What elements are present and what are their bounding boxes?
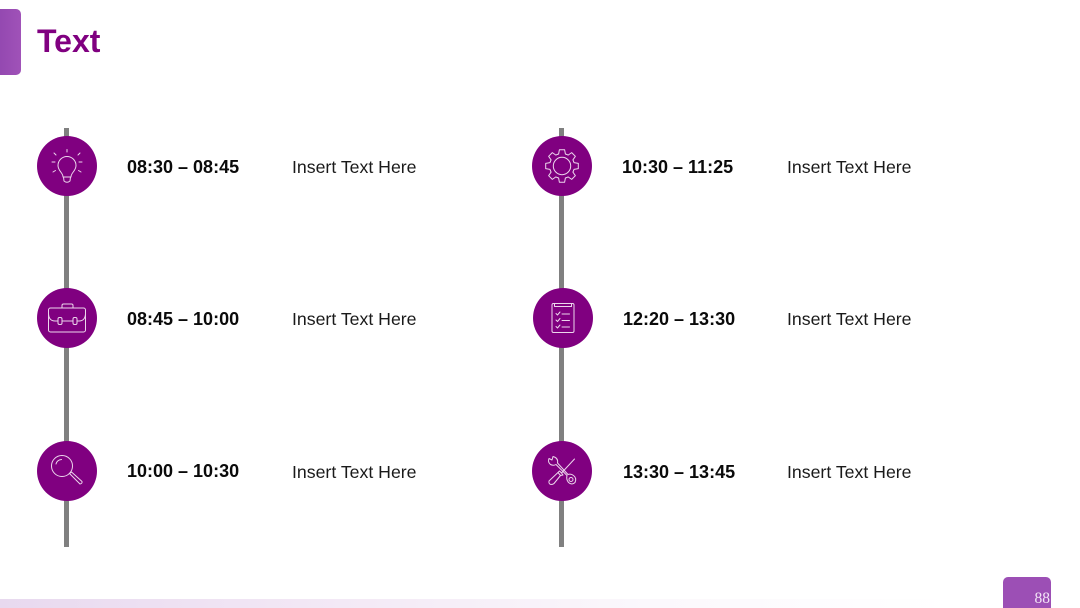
left timeline line	[64, 128, 69, 547]
label: row 1 right: Insert Text Here	[787, 157, 912, 177]
icon: magnifying glass	[37, 441, 97, 501]
icon: checklist clipboard	[533, 288, 593, 348]
time: row 2 left: 08:45 – 10:00	[127, 309, 239, 329]
icon: briefcase	[37, 288, 97, 348]
footer gradient band	[0, 599, 1003, 608]
page number tab	[1003, 577, 1051, 608]
header accent tab	[0, 9, 21, 75]
time: row 2 right: 12:20 – 13:30	[623, 309, 735, 329]
page number: 88	[1034, 590, 1050, 607]
label: row 1 left: Insert Text Here	[292, 157, 417, 177]
label: row 3 left: Insert Text Here	[292, 462, 417, 482]
time: row 1 right: 10:30 – 11:25	[622, 157, 733, 177]
time: row 3 left: 10:00 – 10:30	[127, 461, 239, 481]
label: row 2 right: Insert Text Here	[787, 309, 912, 329]
time: row 3 right: 13:30 – 13:45	[623, 462, 735, 482]
icon: crossed wrench and screwdriver	[532, 441, 592, 501]
icon: light bulb	[37, 136, 97, 196]
label: row 3 right: Insert Text Here	[787, 462, 912, 482]
right timeline line	[559, 128, 564, 547]
time: row 1 left: 08:30 – 08:45	[127, 157, 239, 177]
icon: gear	[532, 136, 592, 196]
label: row 2 left: Insert Text Here	[292, 309, 417, 329]
title: Text	[37, 23, 100, 59]
